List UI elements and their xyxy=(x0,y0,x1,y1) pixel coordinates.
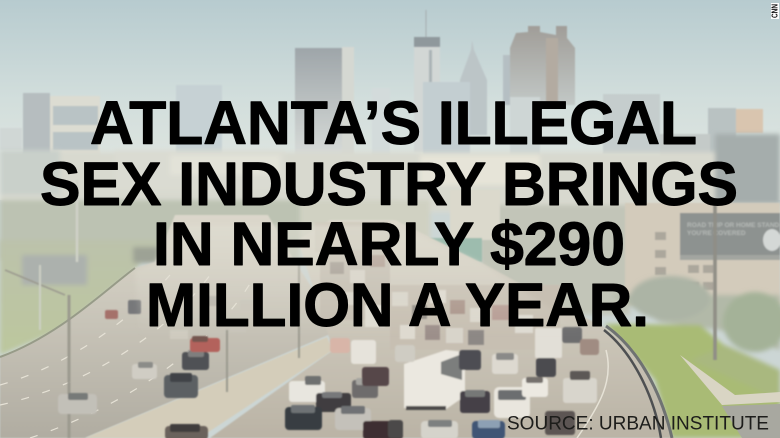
dark guardrail on right curve xyxy=(606,326,672,438)
building and billboard at right xyxy=(397,190,780,305)
car: grey xyxy=(352,378,378,398)
car: dark left bottom xyxy=(388,420,403,438)
traffic: cars and trucks xyxy=(58,300,599,438)
car: bottom brown xyxy=(165,424,208,438)
car: silver far xyxy=(395,345,415,362)
car: bottom dark xyxy=(363,421,403,438)
trees and grass, right embankment xyxy=(605,276,780,438)
pale concrete slab xyxy=(680,355,780,405)
headline line 3: IN NEARLY $290 xyxy=(153,210,625,278)
car: navy xyxy=(285,405,322,430)
concrete median barrier xyxy=(85,337,333,438)
left roadside barrier xyxy=(0,268,135,357)
car: dark xyxy=(182,350,209,370)
car: pale red xyxy=(330,338,350,353)
car: silver xyxy=(58,393,97,414)
car: white sedan xyxy=(522,377,548,397)
car: silver estate xyxy=(335,406,371,430)
van: white minivan xyxy=(494,387,530,418)
car: dark far xyxy=(562,327,582,343)
car: white estate xyxy=(492,353,518,374)
distance haze over road xyxy=(135,225,590,335)
light poles xyxy=(5,180,715,438)
car: dark maroon xyxy=(362,367,389,386)
car: far dark xyxy=(128,300,141,314)
car: silver rear xyxy=(421,420,458,438)
right carriageway xyxy=(210,220,672,438)
car: dark grey wagon xyxy=(164,373,198,398)
billboard: YOU'RE COVERED xyxy=(687,230,746,237)
CNN logo: CNN xyxy=(770,4,780,18)
billboard xyxy=(680,213,780,260)
car: blue xyxy=(472,420,505,438)
car: far red xyxy=(105,310,118,319)
headline xyxy=(40,89,738,339)
car: dark near source xyxy=(545,411,575,435)
car: dark suv xyxy=(536,358,556,377)
headline line 1: ATLANTA’S ILLEGAL xyxy=(90,89,697,157)
left carriageway xyxy=(0,215,340,438)
sky background xyxy=(0,0,780,200)
lane markings xyxy=(0,275,608,438)
road edge at lower right xyxy=(722,404,780,438)
headline line 4: MILLION A YEAR. xyxy=(146,271,649,339)
city skyline xyxy=(0,10,763,194)
car: red xyxy=(190,336,220,352)
trees and grass, left embankment xyxy=(0,240,160,355)
car: pale silver xyxy=(132,362,157,379)
source credit: SOURCE: URBAN INSTITUTE xyxy=(507,414,769,434)
truck: white box xyxy=(535,328,562,358)
van: white xyxy=(351,340,376,364)
mid-ground city haze xyxy=(0,134,780,315)
bus: white coach xyxy=(404,350,465,410)
car: dark minivan xyxy=(459,350,481,370)
inner guardrail xyxy=(604,330,661,438)
car: taupe xyxy=(580,339,599,355)
pickup: white xyxy=(289,376,325,402)
pickup: white loaded xyxy=(563,371,597,403)
distant traffic xyxy=(170,222,560,350)
headline line 2: SEX INDUSTRY BRINGS xyxy=(40,150,738,218)
car: dark sedan xyxy=(460,390,490,413)
car: dark red xyxy=(316,392,351,412)
